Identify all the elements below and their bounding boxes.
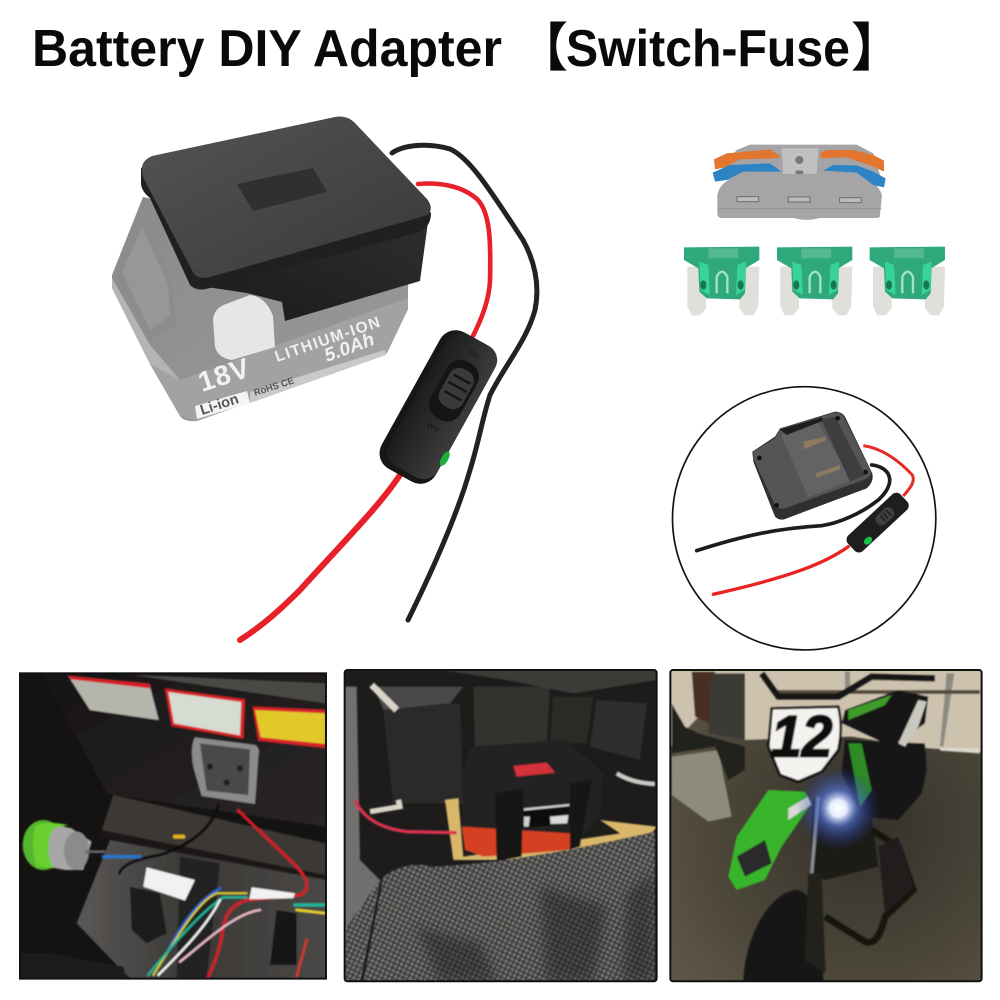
green led	[438, 450, 452, 467]
battery printed labels: 5.0Ah	[322, 329, 377, 367]
tyre and stand	[743, 890, 823, 981]
adapter body	[752, 412, 873, 520]
lever connector	[713, 145, 886, 220]
fork shadow	[812, 800, 878, 880]
fuses	[684, 247, 945, 315]
fuse 2	[777, 247, 852, 315]
title: Switch-Fuse	[566, 20, 850, 78]
number plate: 12	[771, 705, 832, 770]
photo 2: battery strapped in compartment	[345, 670, 657, 981]
bike rear body	[842, 740, 927, 820]
circle inset: adapter underside	[672, 387, 936, 650]
battery printed labels: RoHS CE	[253, 376, 296, 399]
wood base	[445, 798, 657, 860]
red wire upper	[863, 446, 913, 496]
garage wall	[670, 670, 982, 752]
switch labels: ON	[467, 350, 480, 361]
photo 1: adapter installed in ride-on vehicle	[20, 673, 326, 979]
white connectors	[143, 867, 295, 901]
main product photo: battery with adapter and switch	[112, 117, 537, 640]
battery white panel	[213, 295, 275, 360]
wires	[103, 805, 326, 977]
red wire lower	[713, 547, 848, 594]
adapter on wall	[192, 737, 259, 804]
red wire	[240, 184, 490, 640]
battery printed labels: LITHIUM-ION	[273, 314, 382, 366]
tray floor	[77, 840, 326, 979]
battery printed labels	[194, 314, 386, 419]
title: 】	[851, 6, 903, 81]
slider knob	[424, 354, 484, 427]
compartment wall	[383, 703, 463, 803]
mesh fold shadows	[417, 873, 655, 981]
headlight glow	[797, 767, 880, 850]
adapter side wall	[193, 222, 428, 321]
red wire and mount	[355, 800, 457, 833]
title	[32, 6, 903, 81]
orange levers	[714, 149, 884, 172]
fuse 3	[870, 247, 945, 315]
photo 3: dirt bike with light	[670, 670, 982, 981]
shelf bar	[102, 795, 326, 877]
adapter lid	[141, 117, 431, 290]
battery printed labels: 18V	[194, 352, 254, 398]
off label: OFF	[425, 422, 441, 435]
motor	[23, 820, 105, 870]
mesh bag	[345, 832, 655, 981]
title: 【	[516, 6, 568, 81]
warning labels	[68, 676, 326, 748]
handlebar	[762, 673, 935, 697]
fuse 1	[684, 247, 759, 315]
black wire	[392, 145, 537, 620]
blue levers	[713, 163, 886, 187]
title: Battery DIY Adapter	[32, 20, 502, 78]
clutter at left	[672, 750, 732, 822]
battery body	[112, 197, 408, 421]
inset switch	[844, 490, 911, 555]
battery printed labels: Li-ion	[198, 391, 241, 419]
rear wall	[43, 673, 326, 827]
frame detail	[373, 687, 463, 710]
black wire	[697, 465, 890, 551]
inline switch	[373, 324, 506, 492]
front fender	[728, 790, 812, 890]
battery	[462, 741, 592, 836]
